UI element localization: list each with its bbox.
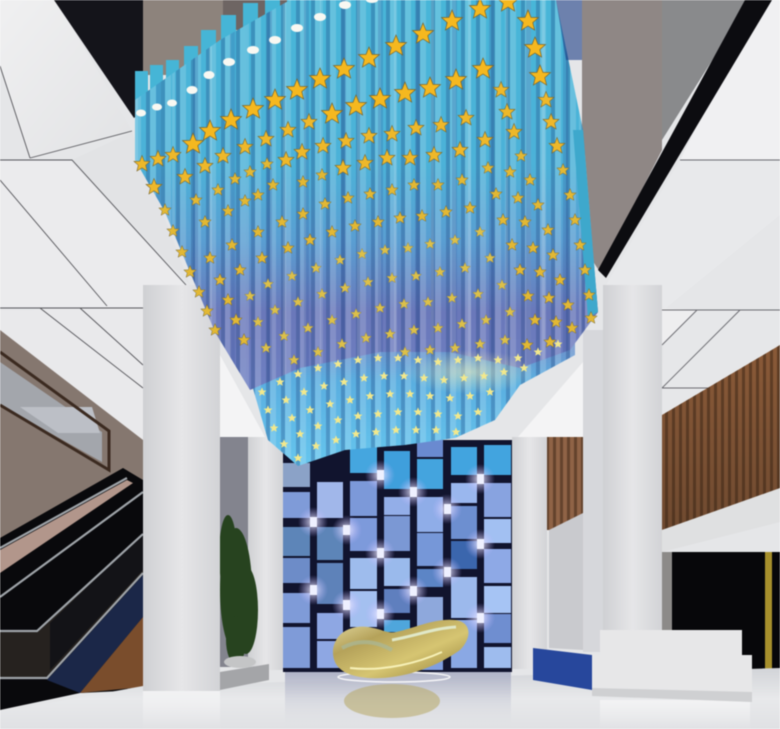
black ceiling reveal bbox=[598, 0, 772, 278]
chandelier: top strip ends bbox=[135, 0, 537, 131]
panel: escalator wall bbox=[0, 330, 143, 580]
chandelier: white crescents bbox=[136, 0, 378, 116]
chandelier: main body bbox=[135, 0, 598, 390]
marble wall block top centre bbox=[223, 0, 293, 30]
ceiling piece top right bbox=[662, 0, 750, 140]
wood panel right of wall bbox=[547, 437, 583, 530]
panel: feature wall bbox=[283, 438, 512, 672]
pillar: front right bbox=[603, 285, 662, 690]
panel: left ceiling bbox=[0, 0, 190, 440]
pillar: back left bbox=[248, 437, 283, 670]
bamboo planter bbox=[219, 515, 269, 690]
gold bean sculpture bbox=[333, 620, 468, 678]
ceiling under chandelier left bbox=[220, 355, 265, 437]
pillar: front right small bbox=[583, 330, 603, 652]
tiles: column 6 bbox=[451, 447, 477, 668]
tiles: column 2 bbox=[317, 482, 343, 668]
dark doorway bbox=[662, 552, 780, 672]
pillar: back right bbox=[512, 437, 547, 669]
marble pillar top right bbox=[582, 0, 662, 272]
panel: right ceiling bbox=[606, 0, 780, 415]
chandelier: glow bbox=[405, 350, 535, 394]
floor ring light bbox=[338, 672, 450, 682]
blue plinth bbox=[533, 648, 592, 690]
side wall behind pillars bbox=[220, 437, 250, 667]
chandelier: pale stars on lower wave bbox=[258, 339, 562, 462]
tiles: column 4 bbox=[384, 451, 410, 632]
chandelier bbox=[134, 0, 598, 466]
chandelier: small stars bbox=[204, 174, 515, 365]
wood slat wall bbox=[662, 345, 780, 530]
floor bbox=[0, 668, 780, 729]
floor reflection bbox=[143, 672, 750, 729]
pillar: front left bbox=[143, 285, 220, 691]
tiles: column 1 bbox=[283, 463, 310, 668]
partition bbox=[549, 513, 583, 650]
ceiling under chandelier right bbox=[518, 362, 583, 437]
escalator bbox=[0, 468, 143, 710]
glowing nodes bbox=[298, 460, 495, 633]
chandelier: large stars bbox=[134, 0, 550, 194]
tiles: column 7 bbox=[484, 445, 511, 668]
chandelier: medium stars bbox=[159, 82, 597, 350]
marble wall block top left bbox=[143, 0, 223, 75]
tiles: column 5 bbox=[417, 438, 443, 670]
dark escalator void at top left bbox=[54, 0, 143, 118]
white ledge bbox=[662, 488, 780, 552]
tiles: column 3 bbox=[350, 445, 377, 627]
chandelier: lower wave section bbox=[252, 335, 575, 466]
reception desk bbox=[592, 630, 752, 702]
